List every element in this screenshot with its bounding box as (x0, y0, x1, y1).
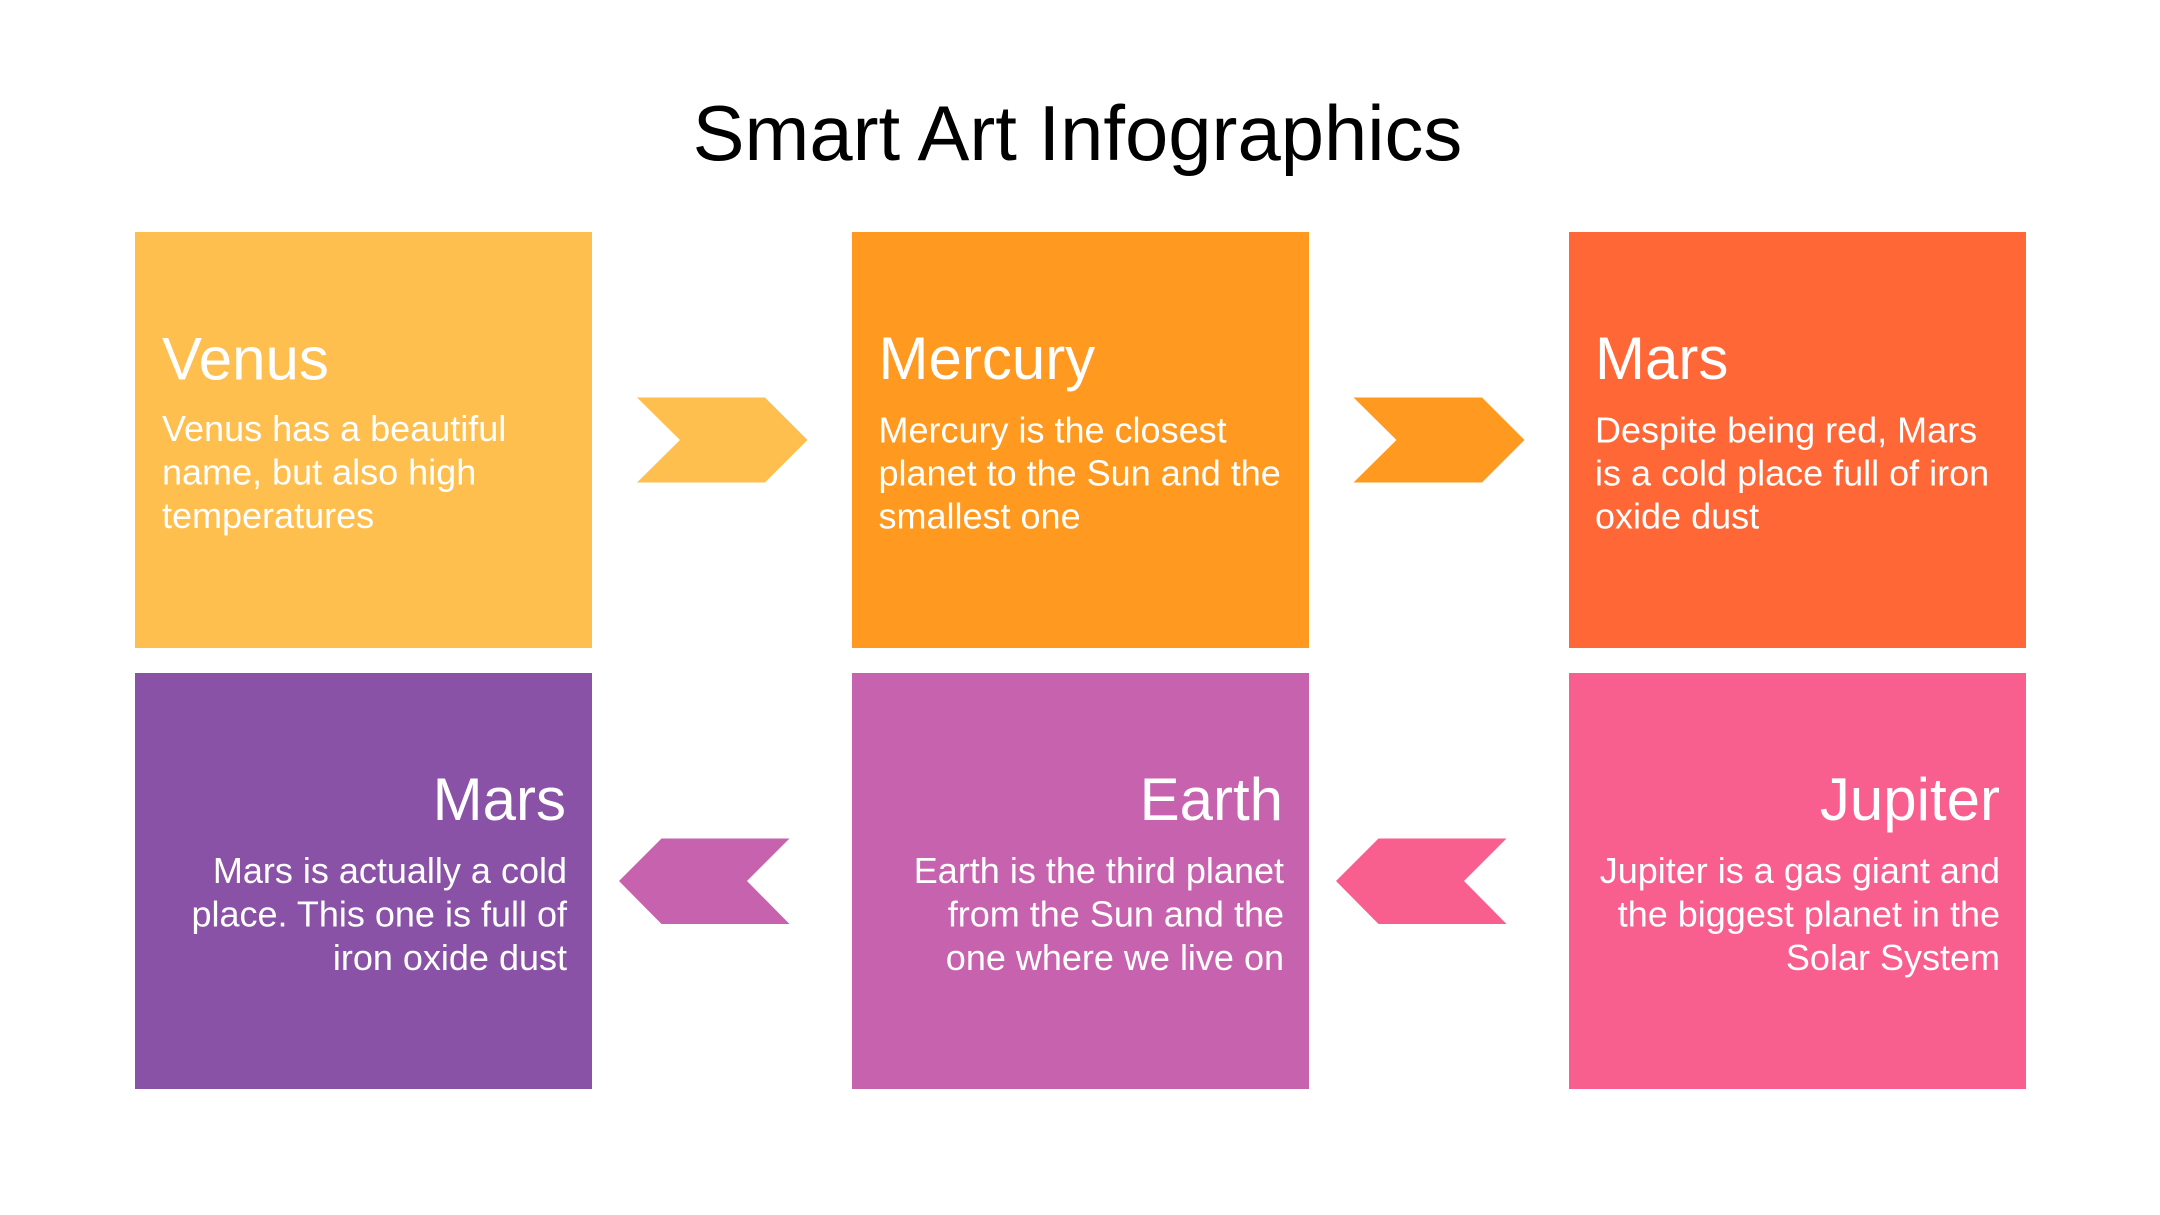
heading: Earth: Earth (1140, 766, 1283, 833)
text: Mercury description: Mercury is the closest (878, 410, 1227, 450)
panel: Earth (852, 673, 1309, 1089)
arrow: Mercury to Mars (1354, 398, 1524, 482)
heading: Mars: Mars (1595, 325, 1728, 392)
panel: Mercury (852, 232, 1309, 648)
panel: Mars (bottom) (135, 673, 592, 1089)
heading: Venus: Venus (162, 326, 329, 392)
text: Earth description: one where we live on (946, 937, 1284, 978)
arrow: Jupiter to Earth (1336, 838, 1506, 924)
panel: Mars (top) (1569, 232, 2026, 648)
arrow: Venus to Mercury (637, 398, 808, 482)
heading: Mercury: Mercury (878, 325, 1095, 392)
text: Jupiter description: Solar System (1786, 937, 2000, 978)
text: Mars description: is a cold place full of iron (1595, 452, 1989, 494)
text: Earth description: from the Sun and the (948, 894, 1284, 934)
text: Mercury description: smallest one (878, 496, 1081, 536)
text: Mars description: iron oxide dust (333, 937, 567, 978)
text: Earth description: Earth is the third planet (914, 850, 1284, 891)
text: Venus description: name, but also high (162, 452, 476, 492)
text: Mars description: oxide dust (1595, 496, 1759, 536)
text: Venus description: Venus has a beautiful (162, 408, 506, 449)
title: Smart Art Infographics (693, 91, 1462, 177)
text: Venus description: temperatures (162, 495, 374, 536)
text: Mars description: Mars is actually a cold (213, 850, 567, 891)
text: Mars description: place. This one is full of (191, 894, 568, 934)
heading: Mars: Mars (433, 766, 566, 833)
arrow: Earth to Mars (619, 838, 790, 924)
panel: Venus (135, 232, 592, 648)
heading: Jupiter: Jupiter (1820, 766, 2000, 833)
text: Mercury description: planet to the Sun and the (878, 452, 1281, 494)
panel: Jupiter (1569, 673, 2026, 1089)
text: Mars description: Despite being red, Mars (1595, 410, 1977, 450)
text: Jupiter description: the biggest planet in the (1618, 894, 2000, 934)
text: Jupiter description: Jupiter is a gas giant and (1600, 850, 2000, 891)
